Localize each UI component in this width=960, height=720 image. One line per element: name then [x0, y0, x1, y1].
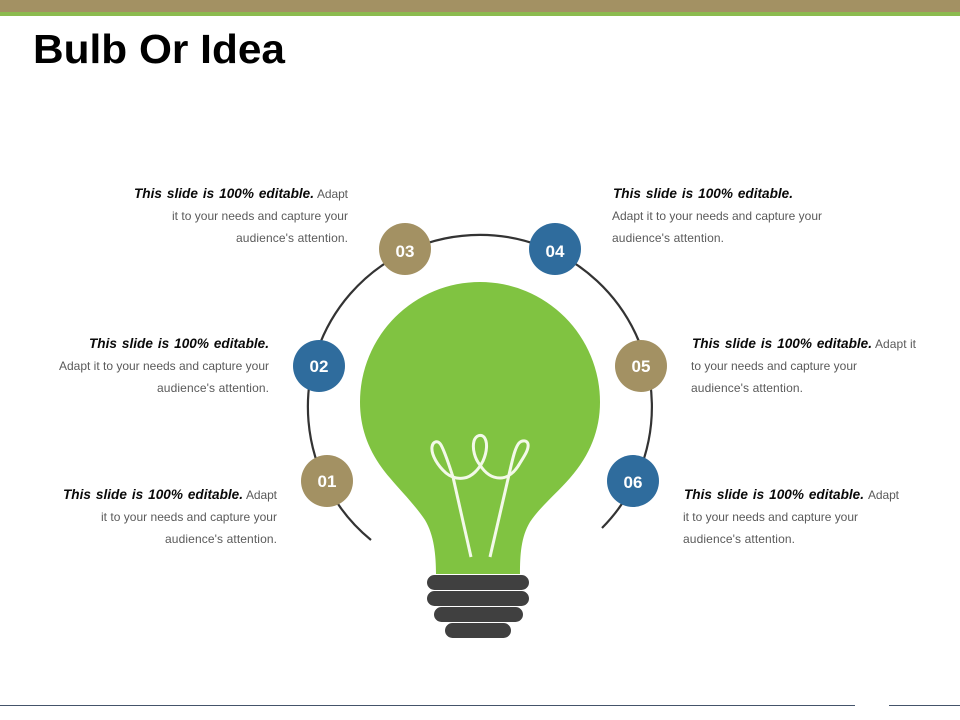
- bulb base: [427, 575, 529, 638]
- text block 05: This slide is 100% editable.: [692, 336, 872, 351]
- badge 05: 05: [632, 357, 650, 376]
- text block 05: Adapt it: [875, 337, 917, 351]
- text block 02: [59, 336, 269, 395]
- badge 01: 01: [318, 472, 336, 491]
- header band: [0, 0, 960, 16]
- badge 03: 03: [396, 242, 414, 261]
- badge 05: [615, 340, 667, 392]
- text block 02: Adapt it to your needs and capture your: [59, 359, 269, 373]
- arc ring: [308, 235, 652, 540]
- text block 01: audience's attention.: [165, 532, 277, 546]
- text block 03: audience's attention.: [236, 231, 348, 245]
- badge 01: [301, 455, 353, 507]
- badge 03: [379, 223, 431, 275]
- bulb glass: [360, 282, 600, 574]
- text block 01: it to your needs and capture your: [101, 510, 277, 524]
- title: Bulb Or Idea: [33, 26, 286, 72]
- text block 03: it to your needs and capture your: [172, 209, 348, 223]
- text block 05: to your needs and capture your: [691, 359, 857, 373]
- text block 01: This slide is 100% editable.: [63, 487, 243, 502]
- badge 06: [607, 455, 659, 507]
- text block 03: [134, 186, 349, 245]
- text block 04: Adapt it to your needs and capture your: [612, 209, 822, 223]
- text block 04: [612, 186, 822, 245]
- text block 06: [683, 487, 900, 546]
- text block 03: Adapt: [317, 187, 349, 201]
- text block 01: [63, 487, 278, 546]
- text block 02: This slide is 100% editable.: [89, 336, 269, 351]
- badge 04: [529, 223, 581, 275]
- icon: light bulb: [360, 282, 600, 638]
- filament: [432, 435, 528, 557]
- badge 02: [293, 340, 345, 392]
- badge 04: 04: [546, 242, 565, 261]
- text block 02: audience's attention.: [157, 381, 269, 395]
- text block 06: it to your needs and capture your: [683, 510, 858, 524]
- footer rule: [0, 705, 960, 706]
- text block 04: audience's attention.: [612, 231, 724, 245]
- text block 06: audience's attention.: [683, 532, 795, 546]
- text block 01: Adapt: [246, 488, 278, 502]
- text block 04: This slide is 100% editable.: [613, 186, 793, 201]
- text block 05: audience's attention.: [691, 381, 803, 395]
- text block 06: Adapt: [868, 488, 900, 502]
- text block 05: [691, 336, 917, 395]
- text block 06: This slide is 100% editable.: [684, 487, 864, 502]
- badge 06: 06: [624, 473, 642, 492]
- text block 03: This slide is 100% editable.: [134, 186, 314, 201]
- badge 02: 02: [310, 357, 328, 376]
